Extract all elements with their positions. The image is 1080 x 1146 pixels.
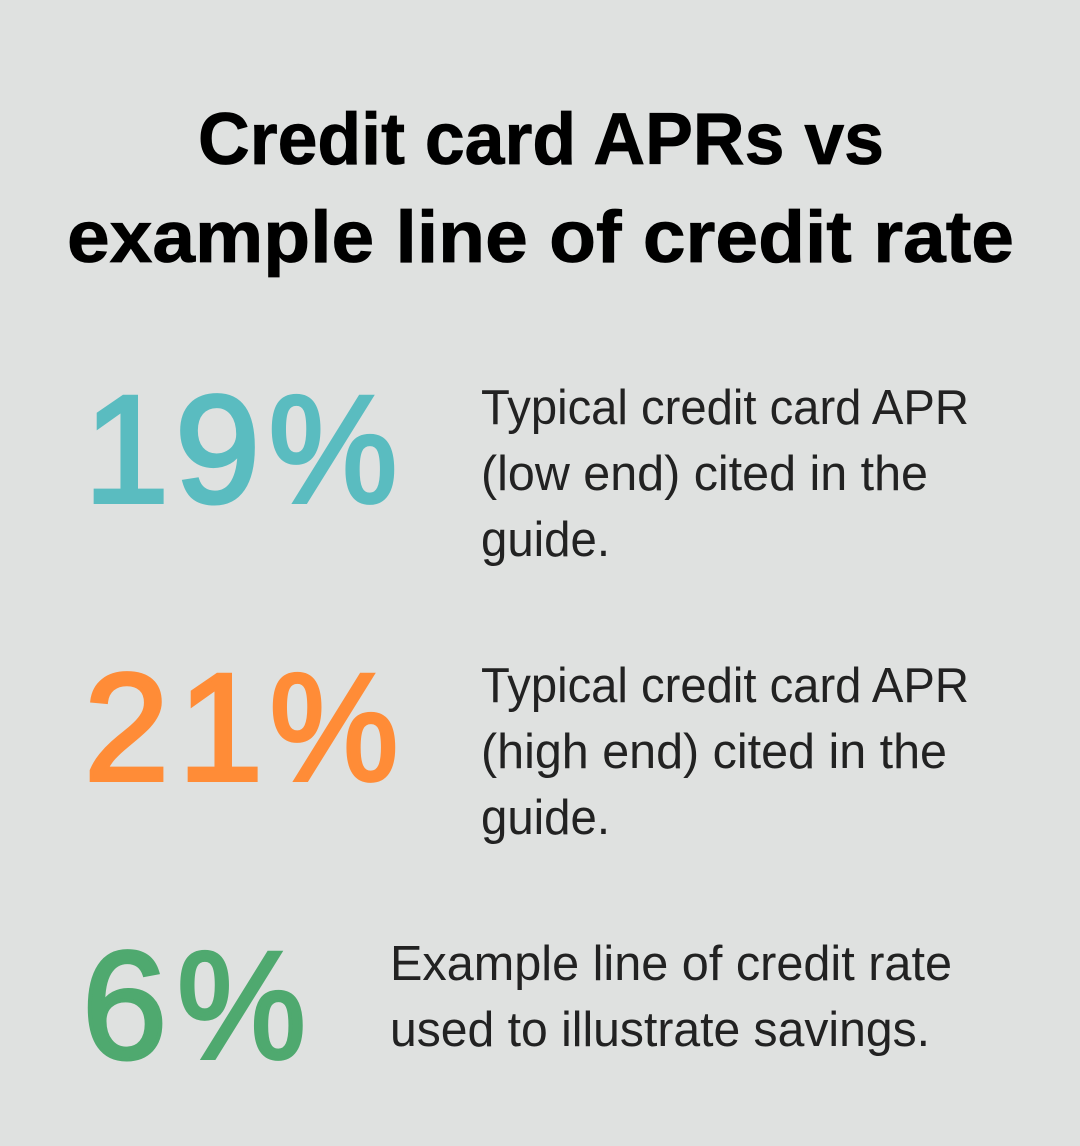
- stat description: high end APR: [481, 659, 969, 845]
- stat value: 6%: [82, 920, 306, 1091]
- title: [67, 99, 1014, 278]
- stat row: 6 percent: [82, 920, 952, 1091]
- stat description: high end APR: guide.: [481, 791, 610, 845]
- stat row: 19 percent: [84, 364, 969, 567]
- title: example line of credit rate: [67, 197, 1014, 278]
- stat description: line of credit rate: Example line of credit rate: [390, 937, 952, 991]
- title: Credit card APRs vs: [198, 99, 884, 180]
- stat description: low end APR: [481, 381, 969, 567]
- stat value: 21%: %: [270, 642, 398, 813]
- stat value: 21%: 21: [84, 642, 263, 813]
- stat description: line of credit rate: [390, 937, 952, 1057]
- stat value: 19%: %: [268, 364, 398, 535]
- stat description: high end APR: (high end) cited in the: [481, 725, 947, 779]
- stat description: low end APR: (low end) cited in the: [481, 447, 928, 501]
- stat value: 6%: 6: [82, 920, 167, 1091]
- stat value: 6%: %: [177, 920, 306, 1091]
- stat description: high end APR: Typical credit card APR: [481, 659, 969, 713]
- stat value: 19%: 19: [84, 364, 260, 535]
- stat row: 21 percent: [84, 642, 969, 845]
- stat description: line of credit rate: used to illustrate savings.: [390, 1003, 930, 1057]
- stat description: low end APR: guide.: [481, 513, 610, 567]
- stat description: low end APR: Typical credit card APR: [481, 381, 969, 435]
- stat value: 21%: [84, 642, 398, 813]
- stat value: 19%: [84, 364, 398, 535]
